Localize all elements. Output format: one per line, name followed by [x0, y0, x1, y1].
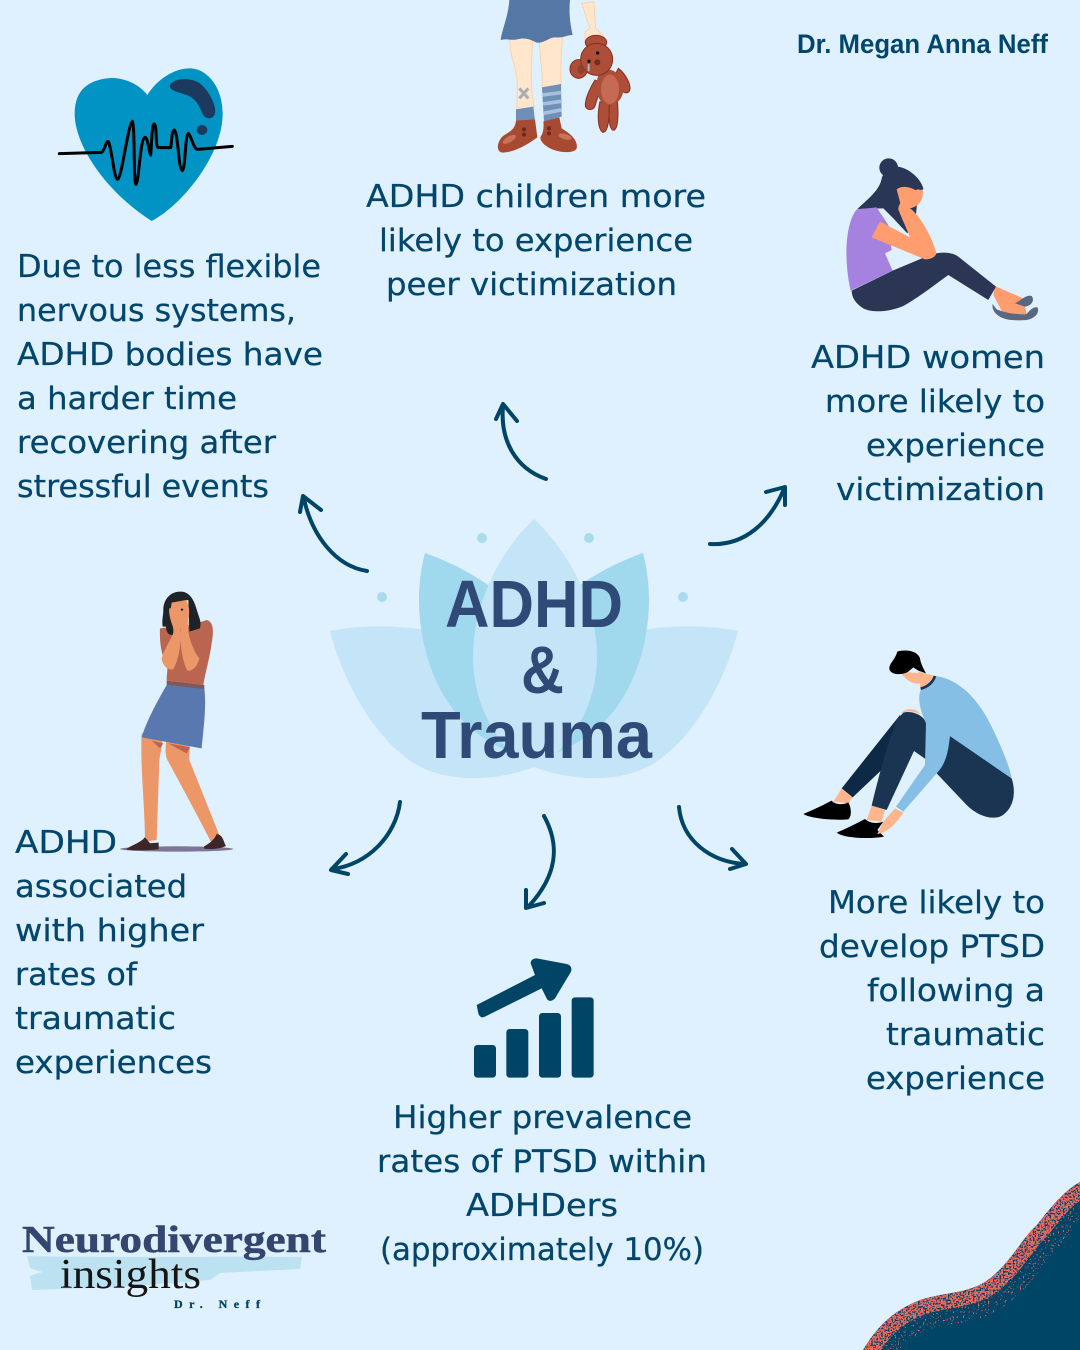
text: traumatic experiences: ADHD	[15, 825, 117, 861]
text: develop PTSD: experience	[866, 1061, 1045, 1097]
text: women victimization	[811, 340, 1045, 508]
text: develop PTSD: More likely to	[828, 885, 1045, 921]
logo: Neurodivergent insights	[22, 1219, 326, 1311]
title: Trauma	[421, 698, 653, 773]
text: nervous systems: ADHD bodies have	[17, 337, 323, 373]
text: women victimization: victimization	[836, 472, 1045, 508]
text: develop PTSD: develop PTSD	[819, 929, 1045, 965]
icon: man sitting head down	[803, 650, 1014, 838]
icon: rising bar chart with arrow	[474, 958, 594, 1078]
text: PTSD prevalence: rates of PTSD within	[377, 1144, 707, 1180]
icon: frightened standing woman	[120, 592, 233, 852]
text: traumatic experiences: with higher	[15, 913, 204, 949]
text: develop PTSD: following a	[867, 973, 1045, 1009]
logo: Neurodivergent insights: insights	[60, 1252, 201, 1298]
title: ADHD	[445, 567, 623, 642]
text: peer victimization	[366, 179, 706, 303]
logo: Neurodivergent insights: Neurodivergent	[22, 1219, 326, 1261]
title: &	[521, 633, 564, 708]
text: develop PTSD	[819, 885, 1045, 1097]
decorative corner blob	[863, 1182, 1080, 1350]
icon: child legs with teddy bear	[498, 0, 630, 153]
arrow: to upper right	[710, 487, 785, 544]
text: PTSD prevalence: ADHDers	[466, 1188, 618, 1224]
arrow: to bottom centre	[526, 816, 554, 908]
text: PTSD prevalence	[377, 1100, 707, 1268]
title	[421, 567, 653, 773]
arrow: to top centre	[496, 404, 546, 479]
text: women victimization: experience	[866, 428, 1045, 464]
arrow: to upper left	[300, 496, 367, 571]
text: traumatic experiences: rates of	[15, 957, 138, 993]
logo: Neurodivergent insights: Dr. Neff	[174, 1297, 261, 1311]
text: women victimization: more likely to	[825, 384, 1045, 420]
icon: lotus flower	[330, 519, 738, 778]
text: nervous systems: recovering after	[17, 425, 276, 461]
text: peer victimization: ADHD children more	[366, 179, 706, 215]
text: nervous systems: Due to less flexible	[17, 249, 321, 285]
icon: heart with pulse	[59, 68, 232, 221]
text: women victimization: ADHD women	[811, 340, 1045, 376]
text: nervous systems: nervous systems,	[17, 293, 296, 329]
text: traumatic experiences: associated	[15, 869, 187, 905]
text: develop PTSD: traumatic	[886, 1017, 1045, 1053]
text: PTSD prevalence: Higher prevalence	[393, 1100, 692, 1136]
text: nervous systems	[17, 249, 323, 505]
text: peer victimization: peer victimization	[386, 267, 677, 303]
text: peer victimization: likely to experience	[379, 223, 693, 259]
text: PTSD prevalence: (approximately 10%)	[380, 1232, 704, 1268]
text: nervous systems: a harder time	[17, 381, 237, 417]
text: traumatic experiences: traumatic	[15, 1001, 176, 1037]
arrow: to lower left	[331, 802, 400, 874]
author name: Dr. Megan Anna Neff	[797, 29, 1049, 59]
icon: woman sitting with head in hands	[846, 158, 1038, 320]
arrow: to lower right	[679, 807, 746, 869]
text: nervous systems: stressful events	[17, 469, 269, 505]
text: traumatic experiences	[15, 825, 212, 1081]
text: traumatic experiences: experiences	[15, 1045, 212, 1081]
